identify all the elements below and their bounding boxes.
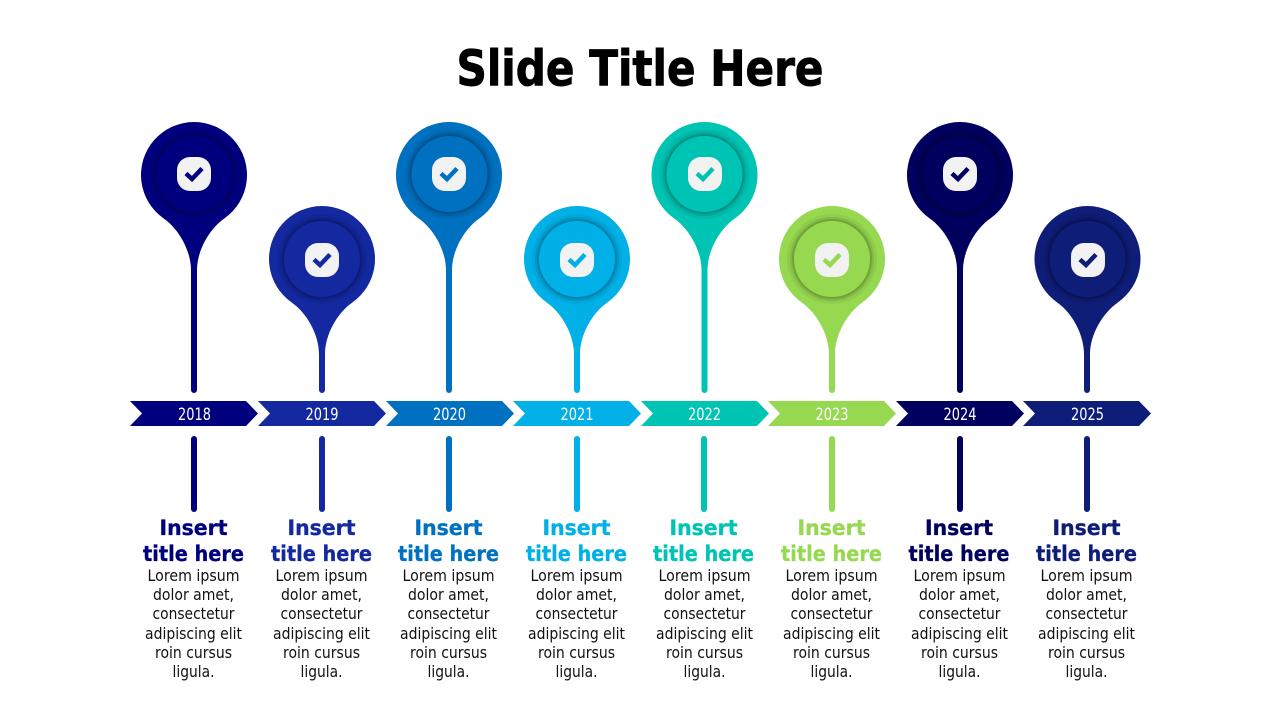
pin: 2022 xyxy=(652,122,758,393)
column: 2022 xyxy=(641,122,769,681)
year arrow: 2020: 2020 xyxy=(433,405,466,425)
body text: 2019: Lorem ipsum xyxy=(276,566,368,585)
pin: 2018 xyxy=(141,122,247,393)
heading: 2018: title here xyxy=(143,542,244,566)
pin: 2021 xyxy=(524,206,630,393)
body text: 2021: roin cursus xyxy=(538,643,615,662)
year arrow: 2021 xyxy=(513,401,641,426)
heading: 2024: Insert xyxy=(925,516,993,540)
body text: 2021: ligula. xyxy=(556,662,598,681)
body text: 2022: roin cursus xyxy=(666,643,743,662)
body text: 2018: adipiscing elit xyxy=(145,624,242,643)
body text: 2021: dolor amet, xyxy=(536,585,617,604)
body text: 2021: Lorem ipsum xyxy=(530,566,622,585)
body text: 2018: ligula. xyxy=(172,662,214,681)
body text: 2018: dolor amet, xyxy=(153,585,234,604)
heading: 2018: Insert xyxy=(160,516,228,540)
body text: 2025 xyxy=(1038,566,1135,681)
year arrow: 2018: 2018 xyxy=(178,405,211,425)
body text: 2025: adipiscing elit xyxy=(1038,624,1135,643)
heading: 2025 xyxy=(1036,516,1137,566)
lower stem: 2018 xyxy=(191,436,197,512)
body text: 2024: roin cursus xyxy=(921,643,998,662)
body text: 2019: consectetur xyxy=(280,604,363,623)
lower stem: 2022 xyxy=(701,436,707,512)
year arrow: 2022 xyxy=(641,401,769,426)
heading: 2020: title here xyxy=(398,542,499,566)
heading: 2019: title here xyxy=(271,542,372,566)
lower stem: 2023 xyxy=(829,436,835,512)
body text: 2021 xyxy=(528,566,625,681)
heading: 2025: title here xyxy=(1036,542,1137,566)
year arrow: 2018 xyxy=(130,401,258,426)
body text: 2018: Lorem ipsum xyxy=(148,566,240,585)
heading: 2024: title here xyxy=(908,542,1010,566)
year arrow: 2024: 2024 xyxy=(944,405,976,425)
body text: 2020 xyxy=(400,566,497,681)
body text: 2018 xyxy=(145,566,242,681)
lower stem: 2024 xyxy=(957,436,963,512)
column: 2021 xyxy=(513,206,641,681)
column: 2023 xyxy=(768,206,896,681)
heading: 2019: Insert xyxy=(288,516,356,540)
year arrow: 2019 xyxy=(258,401,386,426)
body text: 2024: ligula. xyxy=(938,662,980,681)
body text: 2019 xyxy=(273,566,370,681)
pin: 2024 xyxy=(907,122,1013,393)
year arrow: 2019: 2019 xyxy=(306,405,338,425)
heading: 2025: Insert xyxy=(1052,516,1120,540)
column: 2018 xyxy=(130,122,258,681)
body text: 2022: consectetur xyxy=(664,604,746,623)
body text: 2019: ligula. xyxy=(300,662,342,681)
heading: 2020: Insert xyxy=(414,516,482,540)
year arrow: 2021: 2021 xyxy=(560,405,594,425)
body text: 2025: consectetur xyxy=(1046,604,1128,623)
heading: 2018 xyxy=(143,516,244,566)
body text: 2022: dolor amet, xyxy=(664,585,745,604)
heading: 2022: Insert xyxy=(670,516,738,540)
body text: 2025: Lorem ipsum xyxy=(1040,566,1132,585)
pin: 2020 xyxy=(396,122,502,393)
body text: 2018: consectetur xyxy=(152,604,235,623)
body text: 2023: consectetur xyxy=(790,604,873,623)
pin: 2025 xyxy=(1034,206,1140,393)
title: Slide Title Here xyxy=(456,40,824,98)
body text: 2022 xyxy=(656,566,753,681)
column: 2024 xyxy=(896,122,1024,681)
year arrow: 2024 xyxy=(896,401,1024,426)
heading: 2023: title here xyxy=(781,542,882,566)
lower stem: 2019 xyxy=(319,436,325,512)
body text: 2024 xyxy=(911,566,1008,681)
body text: 2023: dolor amet, xyxy=(791,585,872,604)
heading: 2020 xyxy=(398,516,499,566)
lower stem: 2025 xyxy=(1084,436,1090,512)
year arrow: 2020 xyxy=(386,401,514,426)
heading: 2022: title here xyxy=(653,542,754,566)
body text: 2020: adipiscing elit xyxy=(400,624,497,643)
body text: 2023: Lorem ipsum xyxy=(786,566,878,585)
body text: 2022: Lorem ipsum xyxy=(658,566,750,585)
body text: 2021: consectetur xyxy=(536,604,618,623)
body text: 2024: adipiscing elit xyxy=(911,624,1008,643)
heading: 2024 xyxy=(908,516,1010,566)
heading: 2023 xyxy=(781,516,882,566)
body text: 2023 xyxy=(783,566,880,681)
heading: 2023: Insert xyxy=(798,516,866,540)
body text: 2022: adipiscing elit xyxy=(656,624,753,643)
column: 2025 xyxy=(1023,206,1151,681)
body text: 2019: adipiscing elit xyxy=(273,624,370,643)
body text: 2024: dolor amet, xyxy=(919,585,1000,604)
body text: 2025: ligula. xyxy=(1066,662,1108,681)
body text: 2022: ligula. xyxy=(684,662,726,681)
body text: 2019: dolor amet, xyxy=(281,585,362,604)
column: 2020 xyxy=(386,122,514,681)
lower stem: 2021 xyxy=(574,436,580,512)
year arrow: 2025 xyxy=(1023,401,1151,426)
heading: 2021: title here xyxy=(526,542,627,566)
heading: 2019 xyxy=(271,516,372,566)
body text: 2020: dolor amet, xyxy=(408,585,489,604)
body text: 2020: ligula. xyxy=(428,662,470,681)
body text: 2023: roin cursus xyxy=(793,643,870,662)
year arrow: 2023 xyxy=(768,401,896,426)
pin: 2023 xyxy=(779,206,885,393)
body text: 2020: consectetur xyxy=(408,604,490,623)
body text: 2021: adipiscing elit xyxy=(528,624,625,643)
heading: 2021: Insert xyxy=(542,516,610,540)
body text: 2025: roin cursus xyxy=(1048,643,1125,662)
body text: 2024: consectetur xyxy=(918,604,1001,623)
body text: 2023: ligula. xyxy=(810,662,852,681)
body text: 2020: roin cursus xyxy=(410,643,487,662)
body text: 2025: dolor amet, xyxy=(1046,585,1127,604)
year arrow: 2022: 2022 xyxy=(688,405,721,425)
body text: 2023: adipiscing elit xyxy=(783,624,880,643)
heading: 2022 xyxy=(653,516,754,566)
body text: 2019: roin cursus xyxy=(283,643,360,662)
year arrow: 2023: 2023 xyxy=(816,405,848,425)
heading: 2021 xyxy=(526,516,627,566)
body text: 2018: roin cursus xyxy=(155,643,232,662)
lower stem: 2020 xyxy=(446,436,452,512)
pin: 2019 xyxy=(269,206,375,393)
year arrow: 2025: 2025 xyxy=(1071,405,1104,425)
body text: 2024: Lorem ipsum xyxy=(914,566,1006,585)
body text: 2020: Lorem ipsum xyxy=(402,566,494,585)
column: 2019 xyxy=(258,206,386,681)
